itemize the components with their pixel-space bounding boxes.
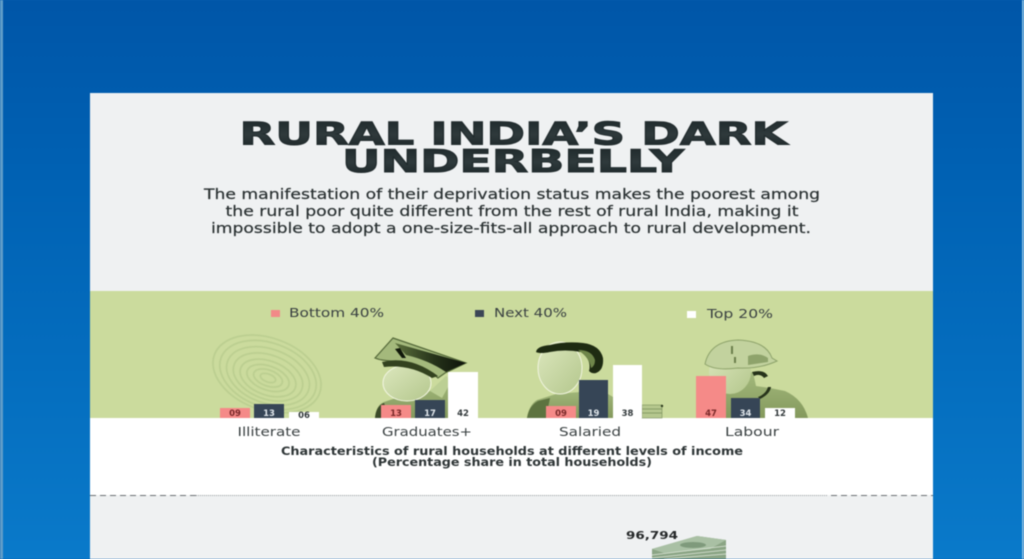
title xyxy=(240,116,789,180)
bar chart: Graduates+: 17 xyxy=(424,409,436,419)
bar chart: Labour: 47 xyxy=(705,409,717,419)
value label: 96,794: 96,794 xyxy=(626,529,678,542)
icon: salaried man xyxy=(527,342,663,418)
bar chart: Labour xyxy=(696,376,795,419)
legend: Next 40% xyxy=(494,305,567,320)
bar chart: Graduates+: 42 xyxy=(457,409,469,419)
bar chart: Illiterate: 06 xyxy=(298,411,310,421)
bar chart: Salaried: 19 xyxy=(588,409,599,419)
chart caption xyxy=(281,444,743,469)
bar chart: Graduates+: 13 xyxy=(390,409,402,419)
category labels xyxy=(238,425,779,439)
bar chart: Graduates+ xyxy=(381,372,478,419)
title: UNDERBELLY xyxy=(342,144,685,180)
legend: Bottom 40% xyxy=(289,305,384,320)
icon: fingerprint xyxy=(202,321,332,427)
bar chart: Labour: 34 xyxy=(740,409,751,419)
chart caption: Characteristics of rural households at different levels of income xyxy=(281,444,743,458)
divider xyxy=(90,494,933,496)
bar chart: Illiterate xyxy=(220,404,319,421)
bar chart: Illiterate: 09 xyxy=(229,409,241,419)
icon: cash stack xyxy=(652,536,726,559)
icon: labourer with hard hat xyxy=(705,340,808,418)
icon: graduate with cap xyxy=(375,338,470,418)
panel: infographic card xyxy=(90,93,933,559)
legend: Top 20% xyxy=(706,306,773,321)
bar chart: Illiterate: 13 xyxy=(263,409,275,419)
title: RURAL INDIA’S DARK xyxy=(240,116,789,152)
intro text xyxy=(203,187,820,237)
category labels: Graduates+ xyxy=(382,425,472,439)
icon: book stack xyxy=(642,405,663,418)
chart caption: (Percentage share in total households) xyxy=(372,455,652,469)
intro text: The manifestation of their deprivation status makes the poorest among xyxy=(203,187,820,203)
bar chart: Salaried xyxy=(546,365,642,419)
category labels: Salaried xyxy=(559,425,621,439)
category labels: Illiterate xyxy=(238,425,300,439)
intro text: impossible to adopt a one-size-fits-all approach to rural development. xyxy=(211,221,811,237)
bar chart: Salaried: 38 xyxy=(622,409,633,419)
bar chart: Salaried: 09 xyxy=(555,409,567,419)
category labels: Labour xyxy=(725,425,779,439)
bar chart: Labour: 12 xyxy=(774,409,786,419)
legend xyxy=(271,305,773,321)
intro text: the rural poor quite different from the rest of rural India, making it xyxy=(226,204,799,220)
panel: household characteristics chart xyxy=(90,291,933,495)
